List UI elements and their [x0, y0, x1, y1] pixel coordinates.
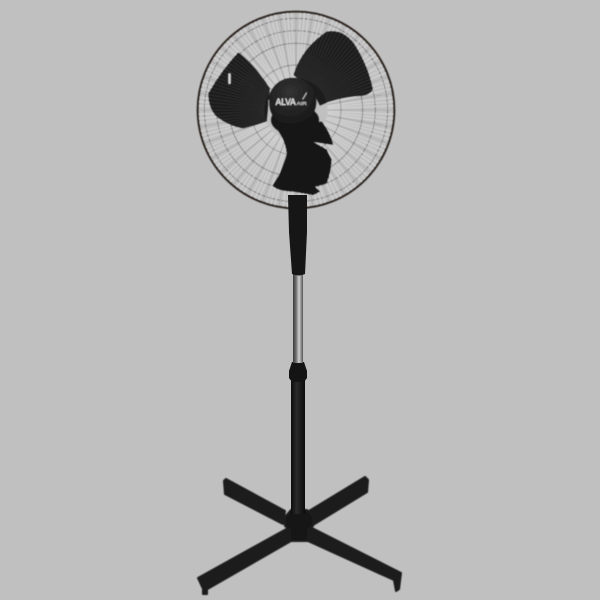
- base leg: front left: [198, 527, 291, 591]
- sticker on left blade: [228, 73, 231, 84]
- blade: upper right: [293, 31, 373, 106]
- collar: [289, 362, 307, 382]
- hub logo suffix: AIR: [297, 101, 307, 106]
- chrome pole: [293, 274, 303, 363]
- motor neck: [288, 195, 307, 276]
- base leg: back right: [309, 477, 368, 525]
- lower pole: [289, 362, 307, 514]
- motor hub back: [271, 105, 319, 135]
- grille rim: [198, 12, 394, 208]
- grille lines: [168, 0, 424, 232]
- base leg: back left: [224, 479, 285, 524]
- blade texture: [209, 32, 372, 128]
- blade: left: [208, 52, 270, 128]
- fan head: [196, 10, 396, 210]
- hub: [268, 78, 316, 126]
- foot: front left: [203, 590, 207, 594]
- base: [198, 477, 401, 594]
- base hub: [285, 510, 313, 541]
- hub logo: ALVA: [276, 97, 296, 107]
- hub arc: [269, 100, 271, 113]
- illustration: black pedestal fan: [196, 10, 403, 596]
- hub logo swoosh: [303, 93, 307, 99]
- base leg: front right: [308, 527, 401, 591]
- blade: bottom: [273, 122, 333, 195]
